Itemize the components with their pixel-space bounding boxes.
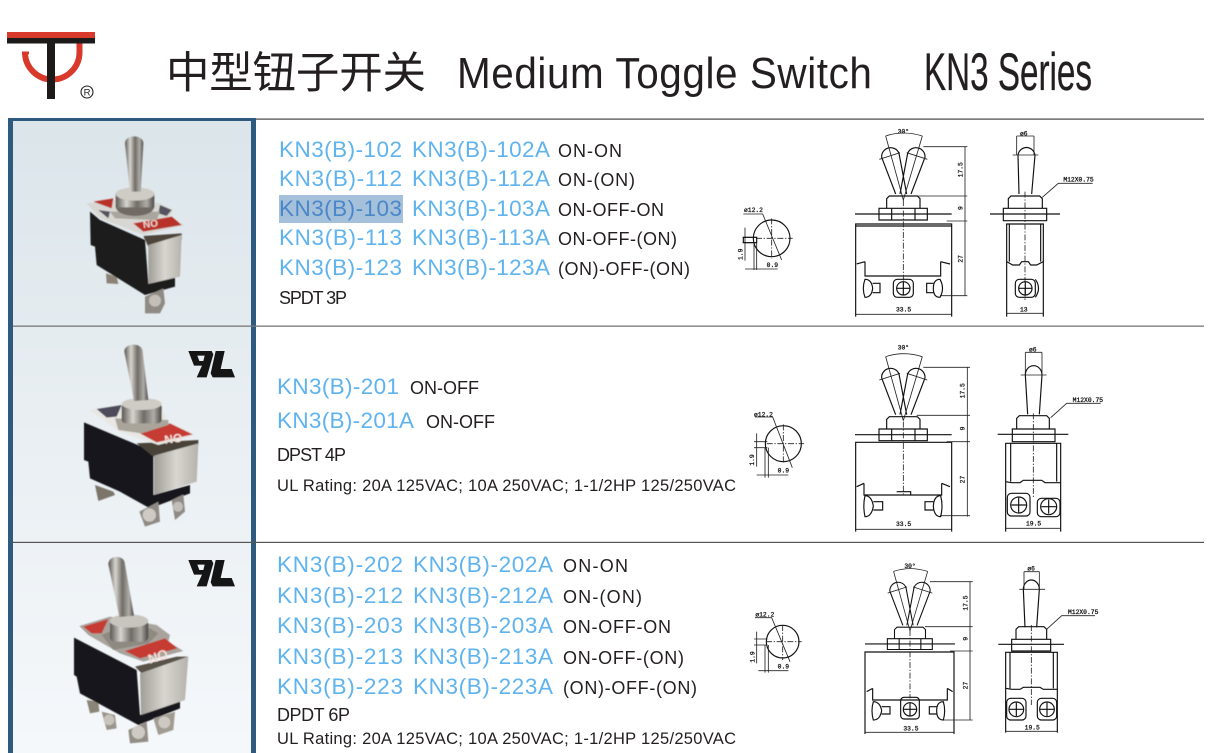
photo: DPST switch: ON <box>163 430 183 447</box>
model list: DPDT row: KN3(B)-203 <box>277 613 403 638</box>
photo: DPDT switch: ON <box>146 646 170 667</box>
model list: SPDT row: KN3(B)-102A <box>412 137 550 162</box>
diagram: front view, row 2: 17.5 <box>960 383 967 398</box>
model list: SPDT row: KN3(B)-103A <box>412 196 550 221</box>
diagram: terminal detail, row 1: ø12.2 <box>744 207 763 214</box>
photo: DPDT switch <box>74 557 188 743</box>
model list: DPST row: KN3(B)-201 <box>277 374 399 399</box>
UL mark: DPST row <box>188 351 235 377</box>
model list: SPDT row: KN3(B)-103 <box>279 196 402 221</box>
model list: DPDT row: DPDT 6P <box>277 705 350 725</box>
model list: SPDT row: KN3(B)-123 <box>279 255 402 280</box>
diagram: side view, row 3: ø6 <box>1027 566 1035 573</box>
diagram: side view, row 3: 19.5 <box>1025 724 1040 731</box>
model list: SPDT row: ON-ON <box>558 141 622 161</box>
model list: DPDT row: KN3(B)-212 <box>277 583 403 608</box>
diagram: front view, row 2: 33.5 <box>896 521 911 528</box>
diagram: terminal detail, row 2: 0.9 <box>778 467 789 474</box>
diagram: side view, row 2: 19.5 <box>1026 521 1041 528</box>
model list: DPST row: ON-OFF <box>410 378 479 398</box>
diagram: side view, row 2: M12X0.75 <box>1073 397 1103 404</box>
model list: SPDT row: KN3(B)-113 <box>279 225 402 250</box>
diagram: side view, row 2 <box>998 347 1103 532</box>
model list: SPDT row: ON-OFF-(ON) <box>558 229 677 249</box>
diagram: front view, row 2: 30° <box>898 344 909 352</box>
diagram: terminal detail, row 1: 1.9 <box>738 248 745 260</box>
model list: SPDT row: KN3(B)-102 <box>279 137 402 162</box>
diagram: side view, row 3 <box>998 566 1099 733</box>
photo: DPST switch <box>84 345 198 527</box>
model list: DPDT row: UL Rating: 20A 125VAC; 10A 250VAC; 1-1/2HP 125/250VAC <box>277 730 736 748</box>
model list: DPDT row: ON-OFF-ON <box>563 617 671 637</box>
model list: SPDT row: KN3(B)-113A <box>412 225 550 250</box>
model list: DPDT row: KN3(B)-203A <box>413 613 553 638</box>
model list: DPDT row: ON-OFF-(ON) <box>563 648 684 668</box>
model list: DPDT row: KN3(B)-213 <box>277 644 403 669</box>
diagram: terminal detail, row 2 <box>749 412 804 478</box>
model list: SPDT row: SPDT 3P <box>279 288 347 308</box>
model list: SPDT row: ON-OFF-ON <box>558 200 664 220</box>
diagram: front view, row 3: 27 <box>963 682 970 689</box>
model list: DPST row: KN3(B)-201A <box>277 408 414 433</box>
diagram: front view, row 1: 30° <box>898 127 909 135</box>
diagram: side view, row 1: M12X0.75 <box>1063 176 1094 183</box>
highlight on KN3(B)-103 <box>279 195 403 223</box>
model list: DPDT row: KN3(B)-202 <box>277 552 403 577</box>
model list: SPDT row: KN3(B)-123A <box>412 255 550 280</box>
model list: DPST row: ON-OFF <box>426 412 495 432</box>
diagram: front view, row 2: 27 <box>960 476 967 483</box>
title: chinese: 中型钮子开关 <box>166 38 426 101</box>
diagram: side view, row 2: ø6 <box>1029 347 1037 354</box>
model list: DPDT row: KN3(B)-223 <box>277 674 403 699</box>
model list: SPDT row: KN3(B)-112 <box>279 166 402 191</box>
diagram: front view, row 1: 33.5 <box>896 307 911 314</box>
diagram: terminal detail, row 3: ø12.2 <box>755 612 775 619</box>
model list: DPDT row: ON-(ON) <box>563 587 642 607</box>
diagram: terminal detail, row 3 <box>750 612 802 673</box>
logo: R <box>84 88 91 98</box>
model list: DPDT row: KN3(B)-213A <box>413 644 553 669</box>
diagram: terminal detail, row 3: 1.9 <box>750 651 757 663</box>
diagram: side view, row 1: 13 <box>1020 306 1028 313</box>
diagram: front view, row 3: 17.5 <box>963 595 970 611</box>
model list: SPDT row: ON-(ON) <box>558 170 635 190</box>
diagram: front view, row 2 <box>855 344 970 532</box>
diagram: front view, row 2: 9 <box>960 426 967 430</box>
UL mark: DPDT row <box>188 560 235 586</box>
model list: DPDT row: KN3(B)-212A <box>413 583 553 608</box>
diagram: side view, row 1 <box>990 130 1094 317</box>
diagram: terminal detail, row 2: 1.9 <box>749 454 756 466</box>
title: series: KN3 Series <box>924 43 1092 102</box>
photo column panel <box>8 118 256 753</box>
diagram: terminal detail, row 3: 0.9 <box>778 664 789 671</box>
photo: SPDT switch: ON <box>142 216 158 229</box>
model list: DPST row <box>277 374 736 495</box>
logo <box>7 32 95 99</box>
diagram: terminal detail, row 2: ø12.2 <box>754 412 773 419</box>
diagram: front view, row 3: 30° <box>904 562 916 570</box>
diagram: side view, row 1: ø6 <box>1020 130 1028 137</box>
model list: DPDT row <box>277 552 736 748</box>
model list: DPST row: UL Rating: 20A 125VAC; 10A 250VAC; 1-1/2HP 125/250VAC <box>277 477 736 495</box>
diagram: side view, row 3: M12X0.75 <box>1068 609 1099 616</box>
model list: SPDT row: KN3(B)-112A <box>412 166 550 191</box>
title: english: Medium Toggle Switch <box>457 48 872 97</box>
model list: DPDT row: KN3(B)-202A <box>413 552 553 577</box>
diagram: front view, row 3: 9 <box>963 637 970 641</box>
diagram: front view, row 1: 9 <box>958 206 965 210</box>
model list: DPDT row: ON-ON <box>563 556 628 576</box>
diagram: terminal detail, row 1: 0.9 <box>767 262 778 269</box>
model list: DPST row: DPST 4P <box>277 445 346 465</box>
model list: SPDT row <box>279 137 690 308</box>
diagram: front view, row 1: 17.5 <box>958 162 965 177</box>
model list: SPDT row: (ON)-OFF-(ON) <box>558 259 690 279</box>
diagram: front view, row 3: 33.5 <box>903 725 919 732</box>
diagram: front view, row 1 <box>855 127 967 317</box>
model list: DPDT row: (ON)-OFF-(ON) <box>563 678 697 698</box>
model list: DPDT row: KN3(B)-223A <box>413 674 553 699</box>
diagram: terminal detail, row 1 <box>738 207 793 270</box>
photo: SPDT switch <box>87 136 185 313</box>
diagram: front view, row 3 <box>865 562 973 734</box>
diagram: front view, row 1: 27 <box>958 255 965 263</box>
